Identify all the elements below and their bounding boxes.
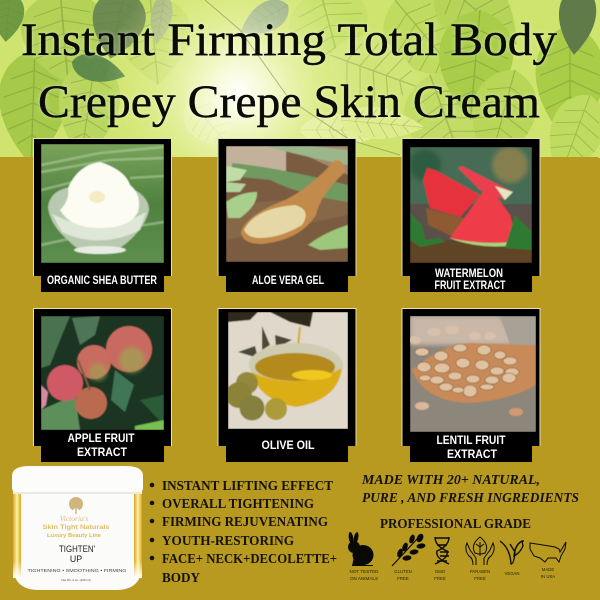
- benefits list: YOUTH-RESTORING: [162, 533, 294, 548]
- benefits list: OVERALL TIGHTENING: [162, 496, 314, 511]
- jar text: Victoria's: [60, 514, 88, 523]
- panel: organic shea butter: [34, 138, 172, 292]
- icon: dna, gmo free: GMO: [435, 569, 446, 574]
- photo: watermelon slices: [409, 147, 532, 263]
- benefits list: BODY: [162, 570, 200, 585]
- panel: olive oil: [218, 308, 356, 462]
- label: WATERMELON: [435, 268, 503, 280]
- panel: watermelon fruit extract: FRUIT EXTRACT: [434, 280, 506, 292]
- jar text: Skin Tight Naturals: [42, 524, 110, 531]
- panel: apple fruit extract: EXTRACT: [77, 447, 127, 459]
- icon: usa map, made in usa: MADE: [542, 567, 554, 572]
- icon: wheat, gluten free: [392, 533, 426, 581]
- icon: rabbit, not tested on animals: [348, 532, 379, 581]
- icon: rabbit, not tested on animals: NOT TESTED: [350, 569, 379, 574]
- panel: lentil fruit extract: [402, 308, 540, 462]
- title: [21, 14, 558, 128]
- jar text: Luxury Beauty Line: [47, 533, 101, 539]
- panel: lentil fruit extract: EXTRACT: [447, 449, 497, 461]
- title: Instant Firming Total Body: [21, 14, 558, 66]
- gold background panel: [0, 157, 598, 600]
- panel: watermelon fruit extract: [402, 138, 540, 292]
- title: Crepey Crepe Skin Cream: [38, 76, 540, 128]
- jar text: UP: [70, 554, 82, 564]
- label: ALOE VERA GEL: [252, 275, 324, 287]
- photo: aloe and wooden spoon: [226, 146, 348, 262]
- callout: made with natural ingredients: [361, 472, 579, 505]
- jar text: Net Wt. 4 oz. (120 ml): [61, 578, 91, 582]
- panel: aloe vera gel: [218, 138, 356, 292]
- icon: rabbit, not tested on animals: ON ANIMALS: [350, 576, 378, 581]
- photo: olive oil bowl and olives: [226, 312, 348, 429]
- photo: shea butter in glass bowl: [41, 144, 164, 263]
- title: Instant Firming Total Body: [21, 14, 558, 66]
- title: Crepey Crepe Skin Cream: [38, 76, 540, 128]
- background: leaf canopy: [0, 0, 600, 158]
- photo: apples on a branch: [41, 316, 164, 430]
- jar text: [28, 514, 127, 582]
- benefits list: FIRMING REJUVENATING: [162, 514, 328, 529]
- icon: sprout, vegan: [500, 541, 524, 576]
- product jar: [12, 466, 143, 590]
- icon: hands and leaf, paraben free: [466, 537, 494, 581]
- callout: made with natural ingredients: MADE WITH 20+ NATURAL,: [361, 472, 540, 487]
- icon: dna, gmo free: [434, 537, 449, 581]
- icon: hands and leaf, paraben free: FREE: [474, 576, 486, 581]
- panel: apple fruit extract: [34, 308, 172, 462]
- icon: dna, gmo free: FREE: [434, 576, 446, 581]
- icon: wheat, gluten free: FREE: [397, 576, 409, 581]
- label: ORGANIC SHEA BUTTER: [47, 275, 158, 287]
- label: OLIVE OIL: [262, 440, 314, 452]
- heading: professional grade: PROFESSIONAL GRADE: [380, 516, 531, 531]
- benefits list: FACE+ NECK+DECOLETTE+: [162, 551, 337, 566]
- label: APPLE FRUIT: [68, 433, 134, 445]
- icon: hands and leaf, paraben free: PARABEN: [470, 569, 490, 574]
- icon: wheat, gluten free: GLUTEN: [394, 569, 412, 574]
- jar logo: [69, 497, 83, 514]
- callout: made with natural ingredients: PURE , AND FRESH INGREDIENTS: [362, 490, 579, 505]
- jar text: TIGHTEN': [59, 544, 95, 554]
- icon: usa map, made in usa: [530, 542, 566, 579]
- benefits list: INSTANT LIFTING EFFECT: [162, 478, 333, 493]
- icon: usa map, made in usa: IN USA: [541, 574, 555, 579]
- benefits list: [150, 478, 337, 585]
- icon: sprout, vegan: VEGAN: [504, 571, 520, 576]
- photo: lentils in wooden spoon: [409, 316, 536, 432]
- jar text: TIGHTENING • SMOOTHING • FIRMING: [28, 568, 127, 573]
- label: LENTIL FRUIT: [436, 435, 506, 447]
